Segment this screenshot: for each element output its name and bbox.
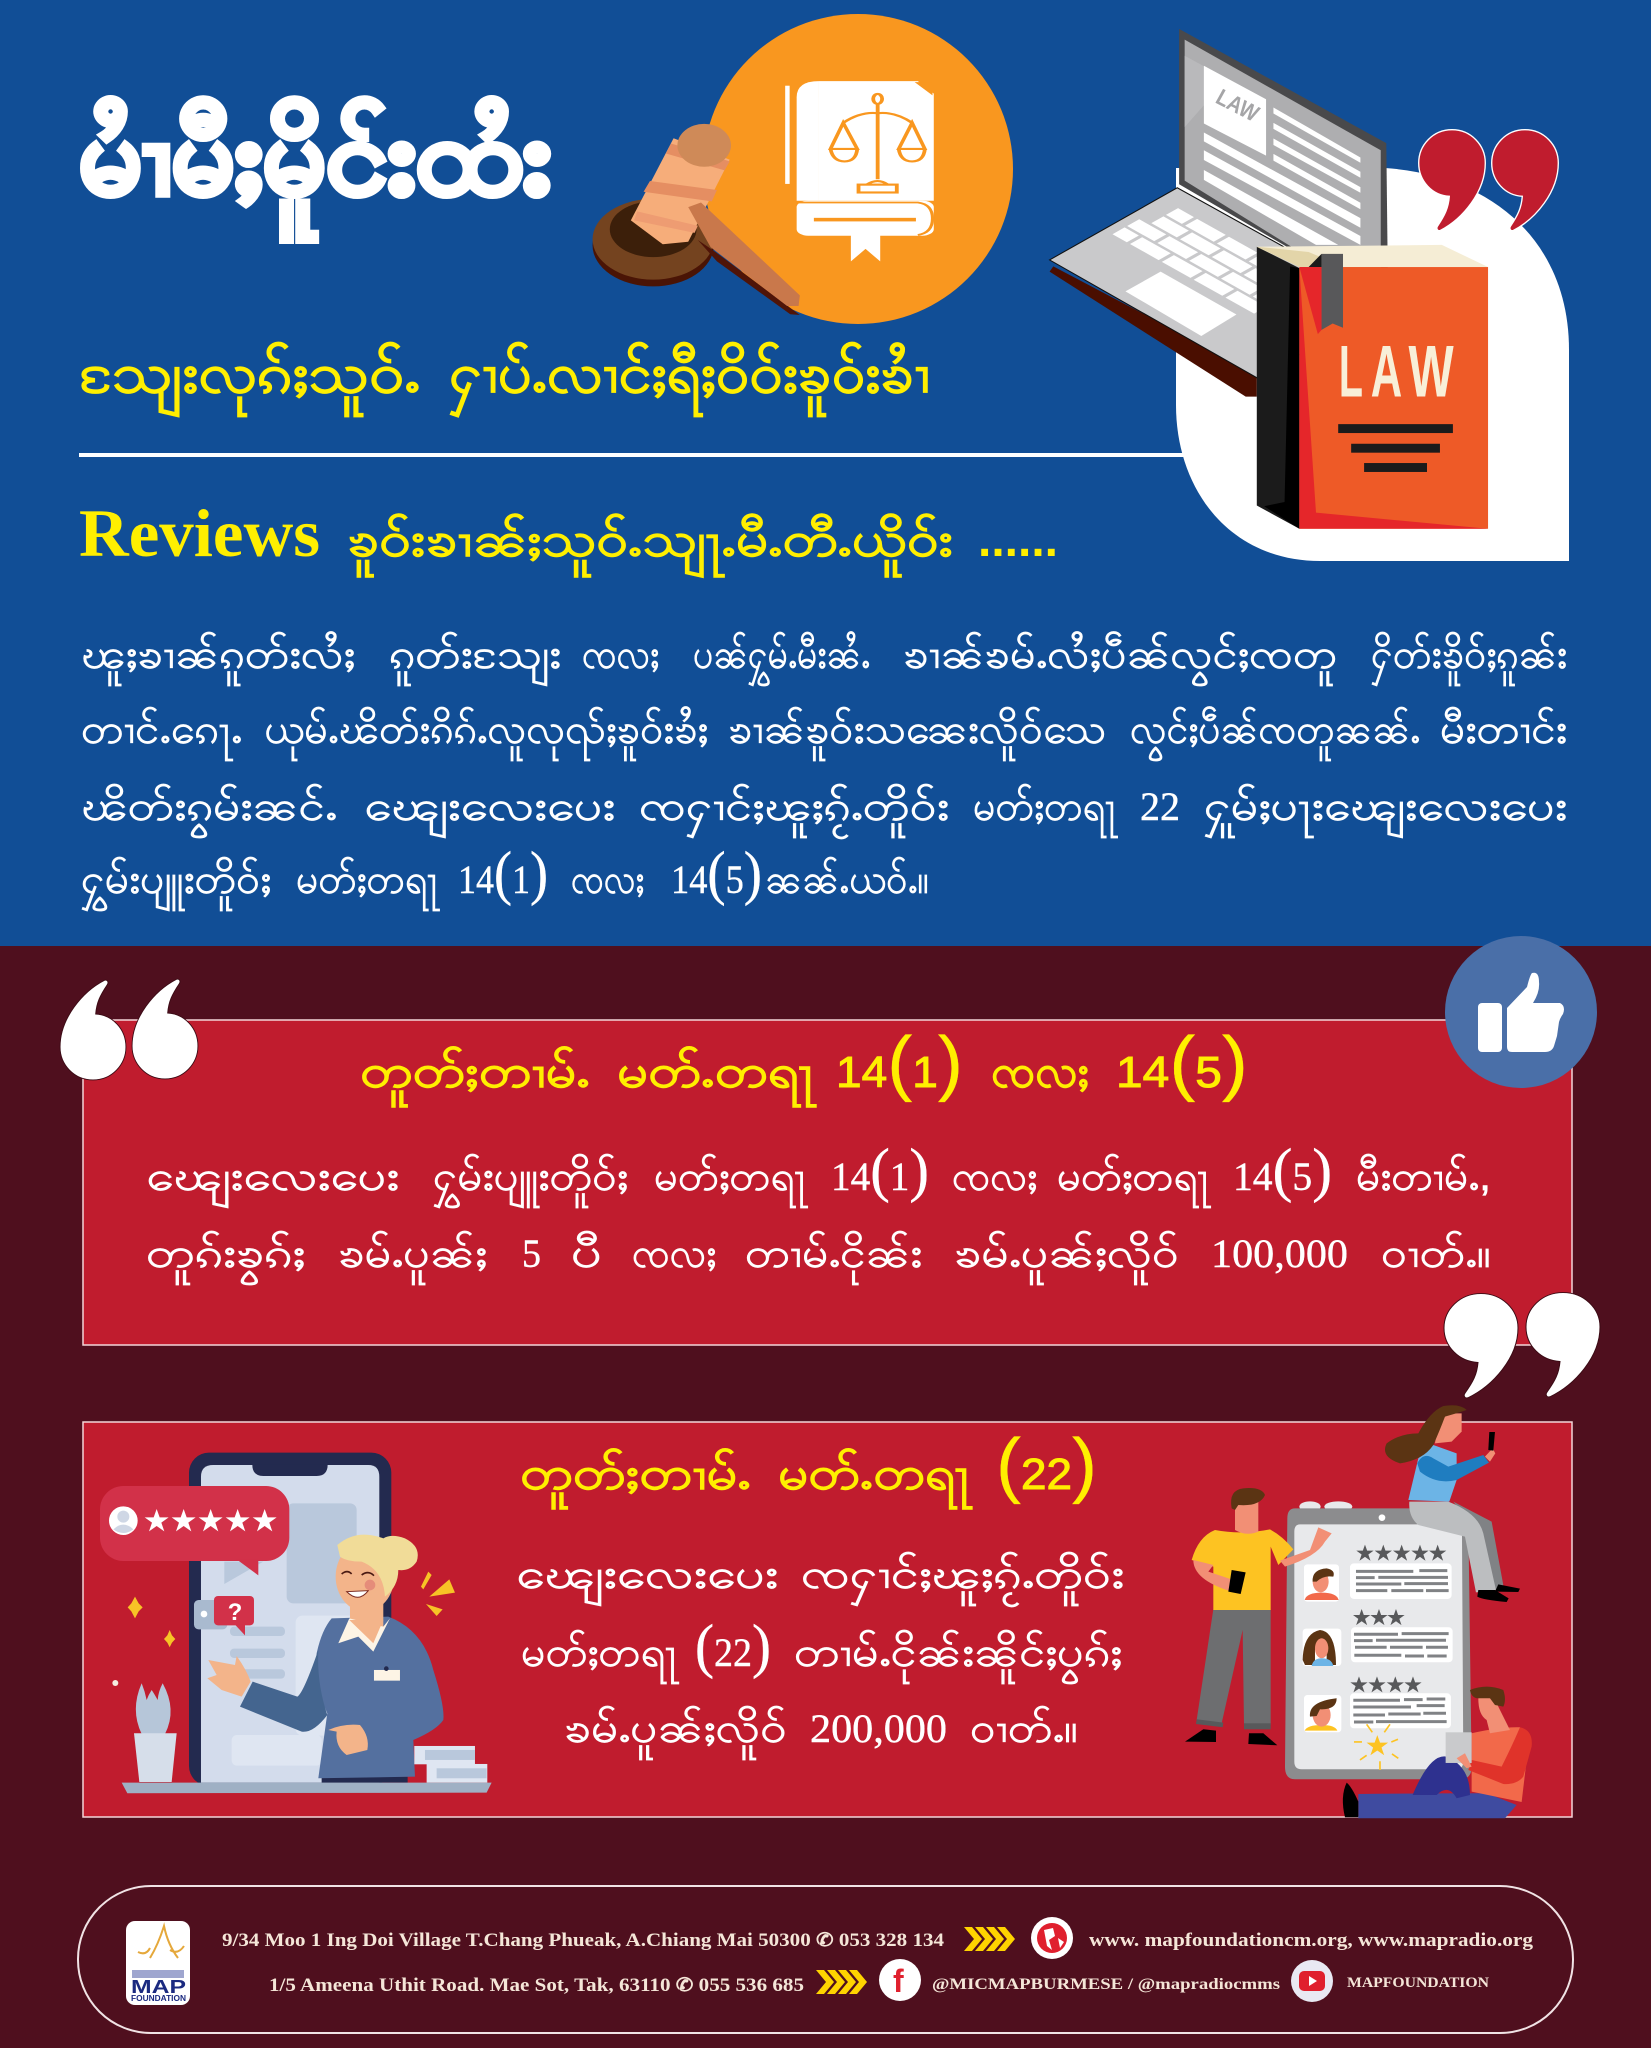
- heading: Reviews: Reviews: [79, 495, 320, 571]
- question bubble: ?: [228, 1599, 242, 1626]
- arrows: [964, 1927, 1015, 1951]
- intro paragraph: ယုမ်ႉၽိတ်းၵိၵ်ႉလူလုၺ်ႈၶူဝ်းၶႆႈ: [264, 705, 708, 762]
- panel heading: 14(5): [1116, 1023, 1248, 1103]
- intro paragraph: [81, 630, 1567, 913]
- panel text: 100,000: [1211, 1231, 1348, 1276]
- panel: section 22 penalty: [83, 1422, 1572, 1817]
- subtitle: [79, 341, 930, 418]
- subtitle: ႁၢပ်ႉလၢင်ႈရီႈဝိဝ်းၶူဝ်းၶၢႆ: [449, 341, 930, 418]
- panel text: ၶမ်ႉပူၼ်ႈလိူဝ်: [954, 1229, 1179, 1286]
- subtitle: သျႄးလုၵ်ႈသူဝ်ႉ: [79, 341, 420, 418]
- review bubble: [100, 1486, 289, 1575]
- intro paragraph: 14(1): [458, 840, 548, 906]
- intro paragraph: ႁိတ်းၶိူဝ်ႈၵူၼ်း: [1371, 630, 1567, 688]
- intro paragraph: ၽျေးလေးပေး: [364, 783, 615, 840]
- panel text: မတ်ႈတရႃ: [1057, 1152, 1211, 1209]
- panel text: ၸႁၢင်ႈၽူႈၵႂ်ႉတိူဝ်း: [801, 1550, 1124, 1608]
- intro paragraph: ၸႁၢင်ႈၽူႈၵႂ်ႉတိူဝ်း: [639, 782, 949, 840]
- bottom maroon section background: [0, 946, 1651, 2048]
- icon: thumbs up: [1445, 936, 1597, 1088]
- address: Chiang Mai: 9/34 Moo 1 Ing Doi Village T.Chang Phueak, A.Chiang Mai 50300 ✆ 053 328 134: [222, 1931, 944, 1951]
- panel text: ႁွမ်းပျူးတိူဝ်ႈ: [433, 1152, 628, 1210]
- logo: [126, 1921, 190, 2005]
- icon: facebook: f: [893, 1963, 904, 1999]
- panel text: ၽျေးလေးပေး: [146, 1153, 399, 1210]
- intro paragraph: ၶၢၼ်ၶူဝ်းသၼေးလိူဝ်သေ: [728, 705, 1106, 762]
- logo: FOUNDATION: [131, 1994, 186, 2003]
- intro paragraph: ႁွမ်းပျူးတိူဝ်ႈ: [81, 855, 271, 913]
- woman: [207, 1535, 444, 1783]
- shelf: [122, 1783, 492, 1793]
- intro paragraph: ၸလႈ: [582, 631, 659, 677]
- white divider: [79, 453, 1189, 457]
- illustration: people around review tablet: [1185, 1405, 1532, 1818]
- intro paragraph: ပၼ်ႁွမ်ႉမီးၼႆႉ: [693, 630, 870, 688]
- panel text: 200,000: [810, 1706, 947, 1751]
- footer pill: [78, 1886, 1573, 2033]
- panel text: မတ်ႈတရႃ: [521, 1628, 679, 1685]
- panel text: 14(5): [1233, 1137, 1332, 1203]
- panel heading: [520, 1425, 1097, 1511]
- illustration: laptop and law book with quote marks: A: [1371, 330, 1402, 412]
- panel heading: တူတ်ႈတၢမ်ႉ: [520, 1446, 751, 1511]
- intro paragraph: ၽူႈၶၢၼ်ၵူတ်းလႆႈ: [81, 630, 355, 687]
- panel heading: တူတ်ႈတၢမ်ႉ: [360, 1044, 590, 1109]
- websites: www. mapfoundationcm.org, www.mapradio.org: [1089, 1931, 1534, 1951]
- top blue section background: [0, 0, 1651, 946]
- panel text: 5: [522, 1231, 541, 1276]
- heading: Reviews: ၶူဝ်းၶၢၼ်ႈသူဝ်ႉသျႃႉမီႉတီႉယိူဝ်း: [347, 511, 953, 579]
- woman sitting on tablet: [1385, 1405, 1520, 1602]
- arrows: [816, 1970, 867, 1994]
- man sitting with tablet: [1343, 1687, 1532, 1818]
- panel text: ၽျေးလေးပေး: [516, 1551, 778, 1608]
- intro paragraph: မတ်ႈတရႃ: [973, 782, 1118, 839]
- panel text: မီးတၢမ်ႉ,: [1356, 1152, 1491, 1199]
- panel text: တၢမ်ႉငိုၼ်းၼိူင်ႈပွၵ်ႈ: [794, 1628, 1122, 1685]
- icon: globe: [1031, 1917, 1073, 1959]
- heading: Reviews: [79, 495, 1058, 579]
- logo: MAP: [131, 1977, 186, 1997]
- intro paragraph: ၸလႈ: [571, 856, 644, 902]
- youtube channel: MAPFOUNDATION: [1347, 1975, 1490, 1991]
- intro paragraph: ႁူမ်ႈပႃးၽျေးလေးပေး: [1204, 782, 1567, 840]
- books: [414, 1746, 487, 1783]
- panel text: ပီ: [571, 1229, 602, 1276]
- panel text: [516, 1550, 1124, 1761]
- panel text: ၶမ်ႉပူၼ်ႈ: [338, 1229, 487, 1286]
- intro paragraph: ၽိတ်းၵွမ်းၼင်ႉ: [81, 782, 337, 839]
- intro paragraph: 22: [1140, 784, 1180, 829]
- intro paragraph: ၵူတ်းသျႄး: [389, 630, 561, 688]
- panel text: ၶမ်ႉပူၼ်ႈလိူဝ်: [564, 1704, 787, 1761]
- review rows: [1303, 1545, 1453, 1770]
- panel text: တၢမ်ႉငိုၼ်း: [745, 1229, 922, 1286]
- panel text: [146, 1137, 1491, 1286]
- illustration: woman with phone and review bubble: [100, 1453, 492, 1793]
- panel heading: ၸလႈ: [991, 1045, 1089, 1097]
- illustration: laptop and law book with quote marks: L: [1339, 330, 1363, 412]
- panel text: (22): [695, 1613, 771, 1679]
- illustration: laptop and law book with quote marks: LAW: [1212, 84, 1264, 127]
- address: Mae Sot: 1/5 Ameena Uthit Road. Mae Sot, Tak, 63110 ✆ 055 536 685: [269, 1976, 804, 1996]
- icon: orange circle with law book: [703, 14, 1013, 324]
- panel text: ဝၢတ်ႉ။: [970, 1704, 1078, 1751]
- white closing quote marks: [1444, 1293, 1600, 1398]
- white opening quote marks: [60, 979, 198, 1080]
- red closing quote marks: [1419, 130, 1558, 231]
- panel text: ဝၢတ်ႉ။: [1381, 1229, 1491, 1276]
- panel heading: မတ်ႉတရႃ: [778, 1446, 973, 1511]
- intro paragraph: 14(5): [671, 840, 762, 906]
- illustration: laptop and law book with quote marks: W: [1409, 330, 1454, 412]
- icon: gavel: [593, 124, 800, 315]
- intro paragraph: မတ်ႈတရႃ: [296, 855, 440, 912]
- burst star: [1354, 1724, 1398, 1770]
- plant: [134, 1683, 177, 1782]
- panel heading: မတ်ႉတရႃ: [617, 1044, 817, 1109]
- icon: youtube: [1291, 1960, 1333, 2002]
- panel heading: (22): [996, 1425, 1097, 1505]
- panel text: ၸလႈ: [632, 1230, 716, 1276]
- social handles: @MICMAPBURMESE / @mapradiocmms: [932, 1976, 1280, 1993]
- tablet: [1285, 1501, 1472, 1779]
- panel: section 14 penalty: [83, 1020, 1572, 1345]
- intro paragraph: လွင်ႈပဵၼ်ၸတူၼၼ်ႉ: [1130, 705, 1420, 762]
- white rounded backdrop: [1176, 168, 1569, 561]
- intro paragraph: တၢင်ႉၵေႃႉ: [81, 705, 242, 762]
- title: မၢႆမီႈမိူင်းထႆး: [79, 96, 551, 242]
- intro paragraph: ၼၼ်ႉယဝ်ႉ။: [765, 855, 929, 902]
- panel text: တူၵ်းၶွၵ်ႈ: [146, 1229, 305, 1286]
- avatars: [1303, 1568, 1339, 1731]
- intro paragraph: မီးတၢင်း: [1440, 705, 1567, 752]
- sparkles: [128, 1572, 455, 1647]
- heading: Reviews: ......: [978, 514, 1058, 567]
- panel text: မတ်ႈတရႃ: [654, 1152, 808, 1209]
- panel heading: [360, 1023, 1248, 1109]
- man in yellow shirt: [1185, 1488, 1332, 1745]
- icon: facebook: [879, 1959, 921, 2001]
- panel text: 14(1): [831, 1137, 929, 1203]
- illustration: laptop and law book with quote marks: [1050, 29, 1569, 561]
- intro paragraph: ၶၢၼ်ၶမ်ႉလႆႈပဵၼ်လွင်ႈၸတူ: [903, 630, 1337, 687]
- panel heading: 14(1): [836, 1023, 963, 1103]
- panel text: ၸလႈ: [952, 1153, 1037, 1199]
- question bubble: [214, 1596, 254, 1635]
